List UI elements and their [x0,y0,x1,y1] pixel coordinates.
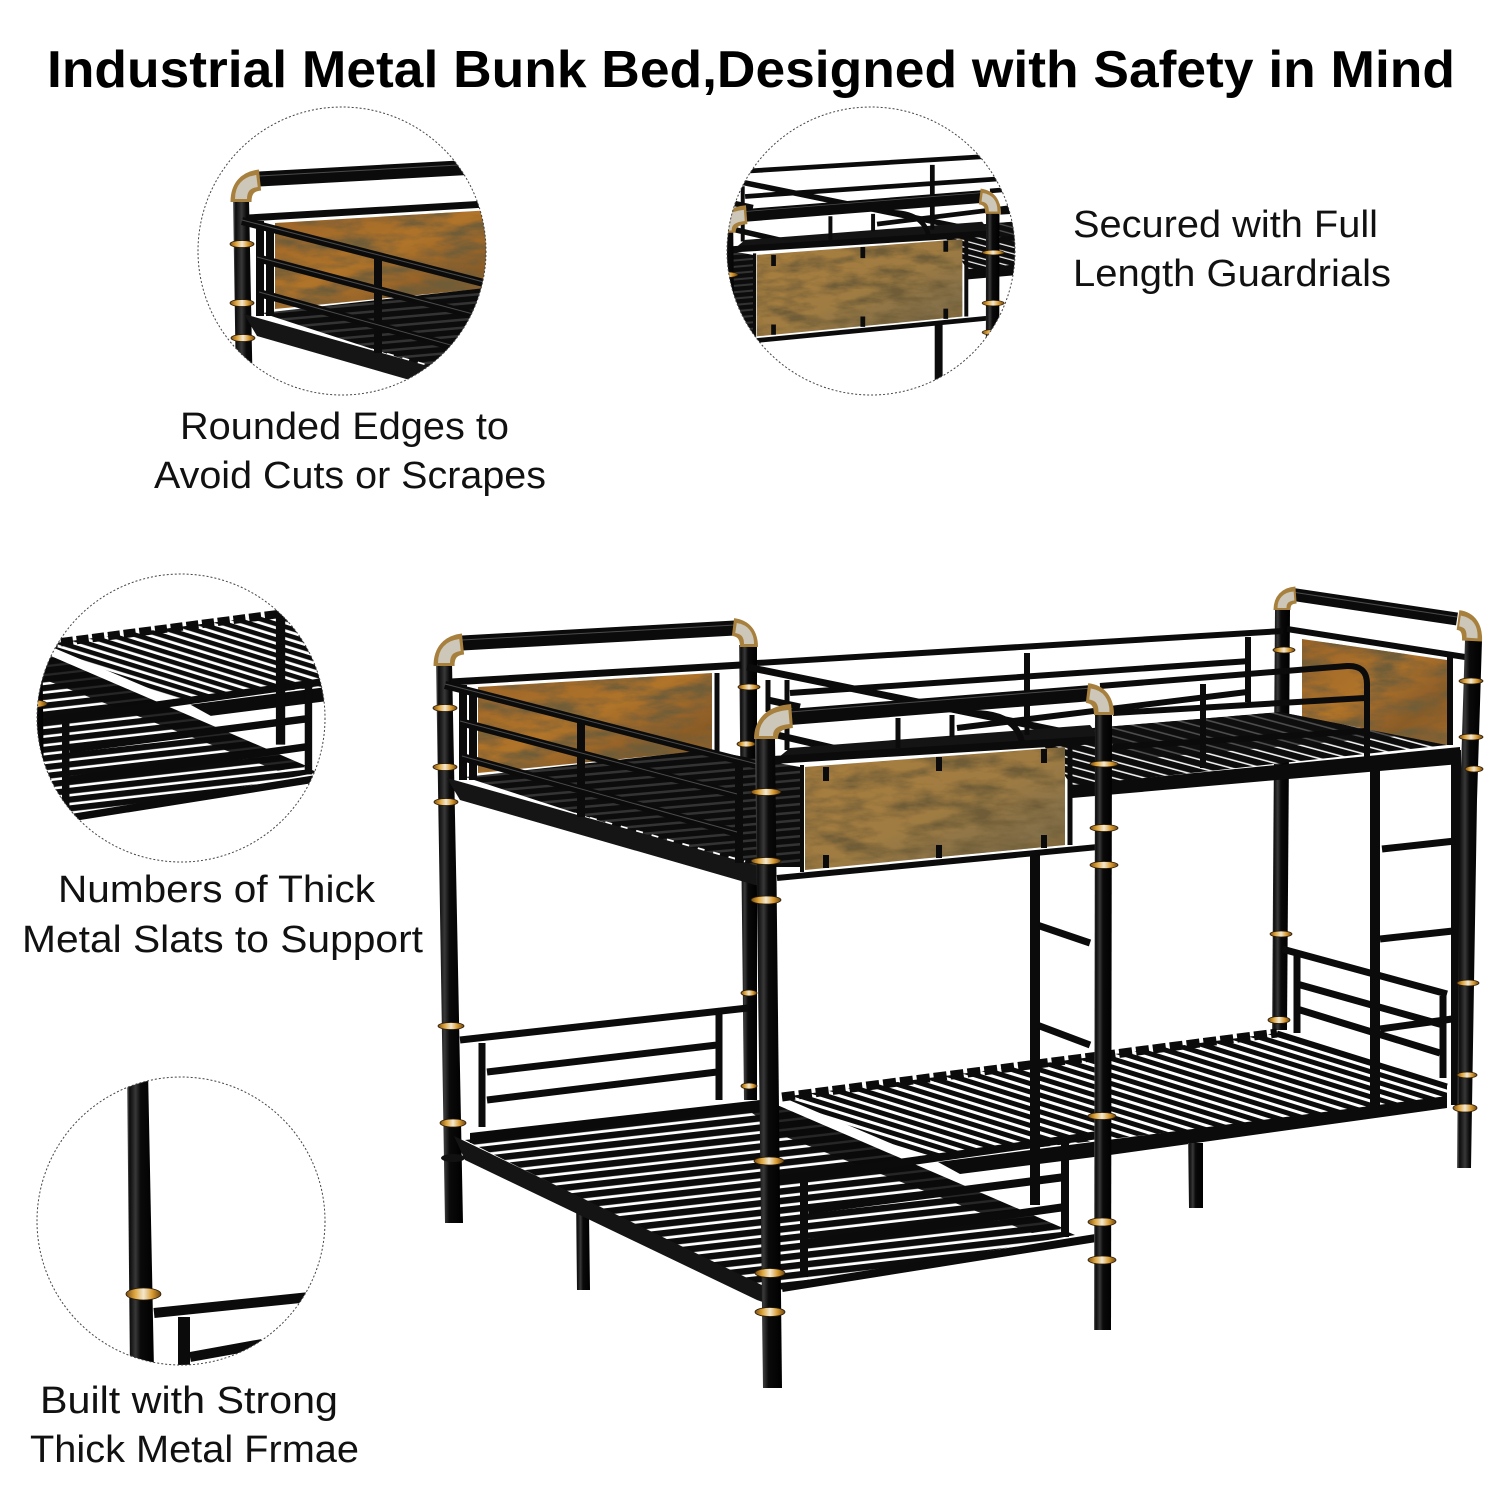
left bunk: upper deck [465,750,800,867]
left ladder rungs [1037,925,1090,1045]
left bunk: lower front guardrail [777,1135,1098,1288]
front panel: deck, rails, wood board and notches [773,710,1100,878]
right bunk: upper deck [1035,712,1460,798]
leg: front left [576,1213,590,1290]
left bunk: top rail and elbows [444,625,749,666]
right bunk: right side edge [1277,1033,1447,1086]
caption: metal slats [22,869,423,961]
left bunk: upper guardrail [445,684,757,863]
left bunk: lower deck slats [465,1100,1075,1290]
front top rail and elbows [755,688,1112,1388]
caption: metal slats: Metal Slats to Support [22,919,423,961]
caption: rounded edges: Avoid Cuts or Scrapes [154,455,546,497]
detail circle: guardrails [726,106,1016,396]
caption: guardrails [1073,204,1391,295]
rings on front posts [751,761,1118,1316]
left bunk: upper headboard [451,665,741,773]
detail circle: metal slats [36,574,326,862]
right ladder rungs [1380,841,1455,1029]
right bunk: back structure [757,610,1465,1030]
leg: rear centre [1188,1143,1203,1208]
caption: rounded edges: Rounded Edges to [180,406,509,448]
caption: metal frame [30,1380,359,1471]
caption: metal slats: Numbers of Thick [58,869,376,911]
caption: guardrails: Secured with Full [1073,204,1378,246]
caption: rounded edges [154,406,546,497]
left bunk: lower side frame [454,1136,768,1304]
right ladder [1375,750,1456,1115]
left bunk: lower headboard rails [460,1008,748,1127]
detail circle: rounded edges [198,106,486,396]
far post with elbow and top rail [1282,592,1482,1168]
left bunk: side frame [447,778,772,886]
title: Industrial Metal Bunk Bed,Designed with Safety in Mind [47,41,1455,99]
right bunk: guardrail [1100,666,1367,768]
left bunk: back posts [436,645,1098,1223]
main illustration: L-shaped metal bunk bed [433,592,1483,1388]
right bunk: lower headboard rails [1282,949,1447,1078]
right bunk: lower deck slats [782,1033,1447,1160]
rings on right posts [1268,647,1483,1112]
right bunk: lower deck back edge and front frame [782,1033,1277,1097]
caption: guardrails: Length Guardrials [1073,253,1391,295]
rings on back-left posts [433,684,760,1162]
left ladder [1030,855,1040,1205]
caption: metal frame: Thick Metal Frmae [30,1429,359,1471]
detail circle: thick metal frame [37,1070,325,1370]
right bunk: lower frame [938,1096,1447,1174]
caption: metal frame: Built with Strong [40,1380,338,1422]
